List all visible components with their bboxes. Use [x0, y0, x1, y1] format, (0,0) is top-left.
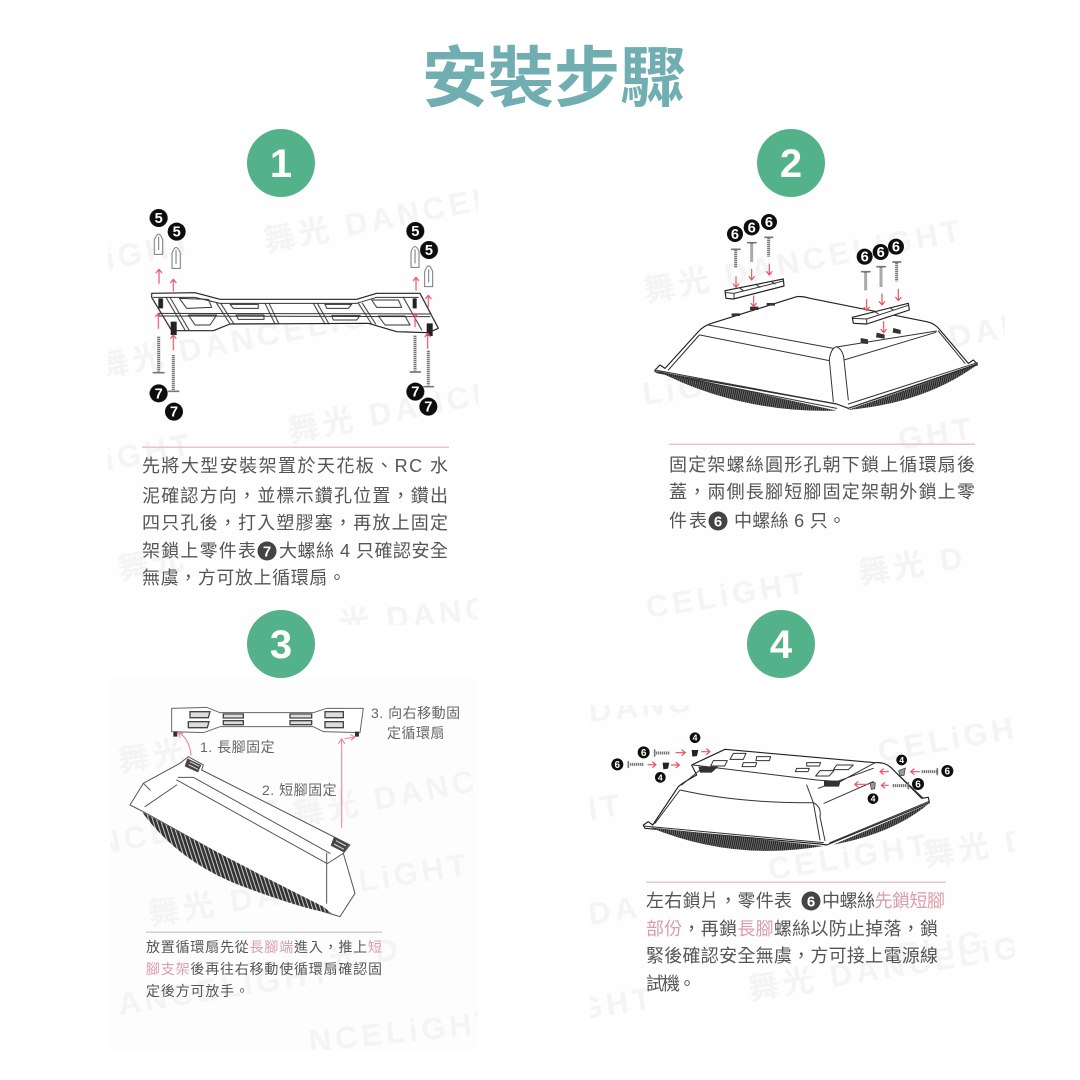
part badges 4 and 6: 4: [899, 755, 904, 765]
watermark: step 4: 舞光 DANCELiGHT: [746, 921, 1073, 1007]
watermark: step 2: GHT: [896, 410, 978, 457]
screws: [732, 237, 901, 291]
watermark: step 4: IT: [586, 787, 626, 827]
step badge 1: [247, 129, 315, 197]
watermark: step 3: NCELiGHT: [307, 1004, 500, 1059]
text block: step 1: 先將大型安裝架置於天花板、RC 水: [142, 456, 448, 476]
text block: step 4: 試機。: [646, 974, 696, 994]
text block: step 1: [142, 446, 449, 588]
text block: step 1: 四只孔後，打入塑膠塞，再放上固定: [142, 513, 448, 533]
text block: step 3: [146, 932, 382, 999]
part badges 4 and 6: 6: [915, 780, 921, 791]
watermark: step 4: CELiGHT: [875, 706, 1043, 769]
screws: [153, 336, 433, 391]
diagram labels: 1. 長腳固定: [200, 739, 275, 755]
step badge 4: [747, 610, 815, 678]
watermark: step 1: [108, 190, 478, 625]
text block: step 2: 中螺絲 6 只。: [734, 511, 846, 531]
text block: step 1: 架鎖上零件表: [142, 541, 256, 561]
part badges 5 and 7: 5: [155, 211, 163, 227]
part badges 4 and 6: 6: [945, 767, 951, 778]
part badges 6: 6: [765, 215, 773, 231]
watermark: step 3: [110, 738, 478, 1050]
watermark: step 3: ANCELIGHT: [116, 953, 335, 1022]
fan tilted: [130, 757, 355, 917]
text block: step 1: 無虞，方可放上循環扇。: [142, 568, 346, 588]
fan and bracket: [643, 749, 929, 851]
part badges 4 and 6: 4: [871, 794, 876, 804]
red arrows: [156, 269, 431, 350]
fan body: [655, 297, 977, 411]
diagram: bracket with anchors and screws: [150, 209, 438, 421]
watermark: step 1: LiGHT: [80, 225, 197, 281]
part badges 6: 6: [892, 240, 900, 256]
panel: step 1: [55, 129, 587, 641]
part badges 4 and 6: 4: [693, 733, 698, 743]
screws: [628, 750, 937, 789]
watermark: step 3: NCELiGHT: [95, 791, 288, 862]
text block: step 2: 件表: [669, 511, 707, 531]
part badges 5 and 7: 7: [170, 405, 178, 421]
pink arrows: [178, 733, 355, 827]
watermark: step 2: 舞光 DANCELIGHT: [641, 212, 967, 309]
part badges 4 and 6: 4: [658, 772, 663, 782]
watermark: step 4: 舞光 D: [921, 821, 1034, 873]
watermark: step 2: 舞光 D: [856, 539, 969, 591]
watermark: step 3: 舞光: [116, 733, 190, 779]
red arrows: [733, 264, 901, 333]
text block: step 2: 6: [714, 514, 722, 530]
text block: step 4: 左右鎖片，零件表: [646, 891, 792, 911]
diagram labels: 2. 短腳固定: [262, 782, 337, 798]
watermark: step 3: 舞光 DANCE: [290, 758, 505, 833]
part badges 4 and 6: 6: [615, 760, 621, 771]
step badge 3: [247, 610, 315, 678]
watermark: step 4: DA: [586, 889, 643, 932]
mounting feet: [725, 279, 909, 324]
text block: step 4: 部份，再鎖長腳螺絲以防止掉落，鎖: [646, 919, 938, 939]
panel: step 2: [644, 129, 1005, 616]
text block: step 2: 固定架螺絲圓形孔朝下鎖上循環扇後: [669, 455, 975, 475]
step badge 3: 3: [270, 623, 292, 667]
diagram labels: [200, 705, 461, 798]
watermark: step 4: ELiG: [896, 924, 988, 972]
red arrows: [648, 749, 919, 788]
watermark: step 4: 舞光: [695, 760, 770, 807]
watermark: step 2: ELiGHT: [616, 361, 757, 415]
part badges 6: 6: [748, 220, 756, 236]
watermark: step 2: CELiGHT: [644, 565, 811, 625]
watermark: step 1: 舞光 DANCELIGHT: [95, 288, 421, 385]
part badges 6: 6: [861, 250, 869, 266]
panel: step 4: [590, 610, 1015, 1018]
diagram: fan rear with mounting feet: [655, 214, 977, 411]
text block: step 1: 大螺絲 4 只確認安全: [279, 541, 448, 561]
panel: step 3: [110, 610, 478, 1050]
part badges 6: 6: [877, 245, 885, 261]
text block: step 4: 中螺絲先鎖短腳: [822, 891, 945, 911]
step badge 1: 1: [270, 142, 292, 186]
text block: step 2: 蓋，兩側長腳短腳固定架朝外鎖上零: [669, 482, 975, 502]
step badge 2: 2: [780, 142, 802, 186]
watermark: step 4: DANC: [587, 683, 696, 729]
watermark: step 2: [644, 220, 1005, 616]
text block: step 3: 放置循環扇先從長腳端進入，推上短: [146, 939, 382, 955]
part badges 6: 6: [731, 227, 739, 243]
watermark: step 2: 舞光 DAN: [865, 306, 1030, 371]
watermark: step 3: 光 D: [326, 931, 404, 977]
watermark: step 3: 舞光 DANCELiGHT: [146, 846, 473, 932]
part badges 5 and 7: 7: [411, 385, 419, 401]
anchors: [154, 234, 433, 287]
text block: step 4: 緊後確認安全無虞，方可接上電源線: [646, 946, 938, 966]
watermark: step 1: 舞光 DANCE: [285, 374, 500, 449]
text block: step 1: 7: [263, 544, 271, 560]
part badges 4 and 6: [611, 732, 953, 804]
part badges 4 and 6: 6: [641, 748, 647, 759]
diagram: side locking plates: [611, 732, 953, 851]
watermark: step 4: CELiGHT: [766, 827, 933, 887]
title: 安裝步驟: [422, 41, 686, 115]
diagram labels: 3. 向右移動固: [371, 705, 461, 721]
text block: step 4: [646, 882, 946, 994]
text block: step 3: 定後方可放手。: [146, 983, 249, 999]
watermark: step 1: 光 DANCE: [337, 588, 518, 641]
text block: step 3: 腳支架後再往右移動使循環扇確認固: [146, 961, 382, 977]
part badges 5 and 7: [150, 209, 438, 421]
part badges 6: [727, 214, 904, 266]
diagram labels: 定循環扇: [387, 725, 445, 741]
watermark: step 1: ELiGHT: [55, 426, 196, 487]
watermark: step 1: 舞光: [115, 539, 190, 587]
text block: step 4: 6: [807, 894, 815, 910]
bracket: [152, 293, 438, 336]
step badge 4: 4: [770, 623, 793, 667]
step badge 2: [757, 129, 825, 197]
bracket: [172, 707, 363, 737]
watermark: step 4: GHT: [576, 980, 658, 1027]
part badges 5 and 7: 5: [411, 224, 419, 240]
watermark: step 1: 舞光 DANCELIGHT: [261, 162, 587, 259]
part badges 5 and 7: 7: [155, 386, 163, 402]
part badges 5 and 7: 5: [173, 225, 181, 241]
plates: [663, 750, 905, 789]
part badges 5 and 7: 5: [425, 243, 433, 259]
part badges 5 and 7: 7: [424, 400, 432, 416]
text block: step 1: 泥確認方向，並標示鑽孔位置，鑽出: [142, 486, 448, 506]
diagram: fan hooked onto bracket: [130, 707, 363, 917]
watermark: step 4: [590, 705, 1015, 1018]
text block: step 2: [669, 444, 975, 531]
